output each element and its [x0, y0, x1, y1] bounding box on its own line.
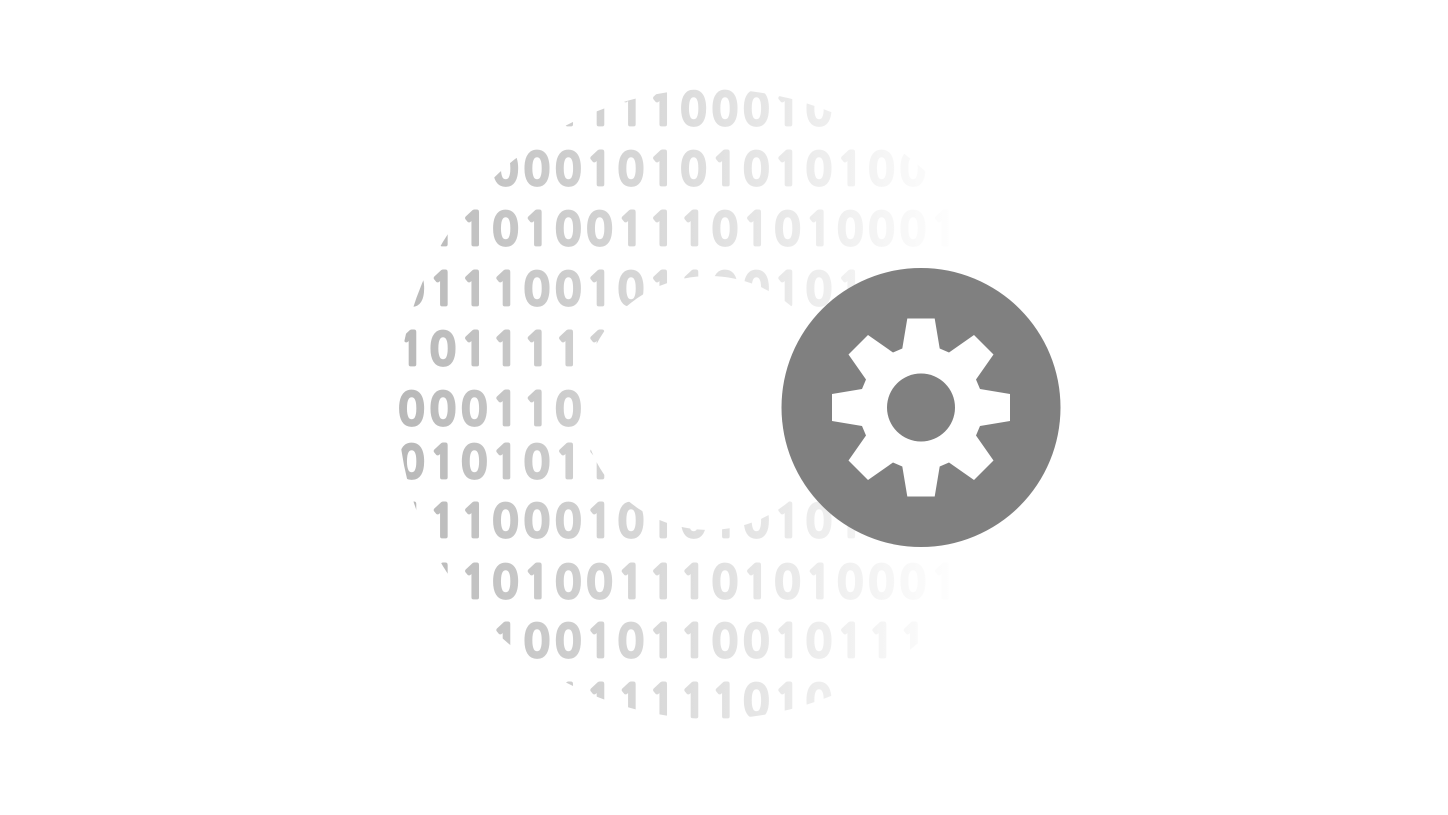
digit row 7: 0101011	[398, 441, 613, 485]
digit row 3: 11010011101010001	[429, 208, 958, 252]
gear	[832, 318, 1010, 496]
digit row 9: 11010011101010001	[429, 561, 958, 605]
digit row 4: 011100101100101	[398, 268, 864, 312]
gear hub	[887, 374, 955, 442]
digit row 5: 1011111	[398, 328, 613, 372]
digit row 2: 00010101010100	[492, 148, 926, 192]
digit row 6: 000110	[398, 388, 582, 432]
binary digit ring	[399, 90, 894, 718]
digit row 10: 10010110010111	[492, 620, 926, 664]
illustration: binary ring with gear badge	[399, 90, 1060, 718]
digit row 8: 111000101010101	[398, 500, 864, 544]
digit row 1: 111100010	[555, 88, 832, 132]
badge circle	[782, 268, 1060, 547]
icon: gear badge	[782, 268, 1060, 547]
digit row 11: 111111010	[555, 680, 832, 724]
